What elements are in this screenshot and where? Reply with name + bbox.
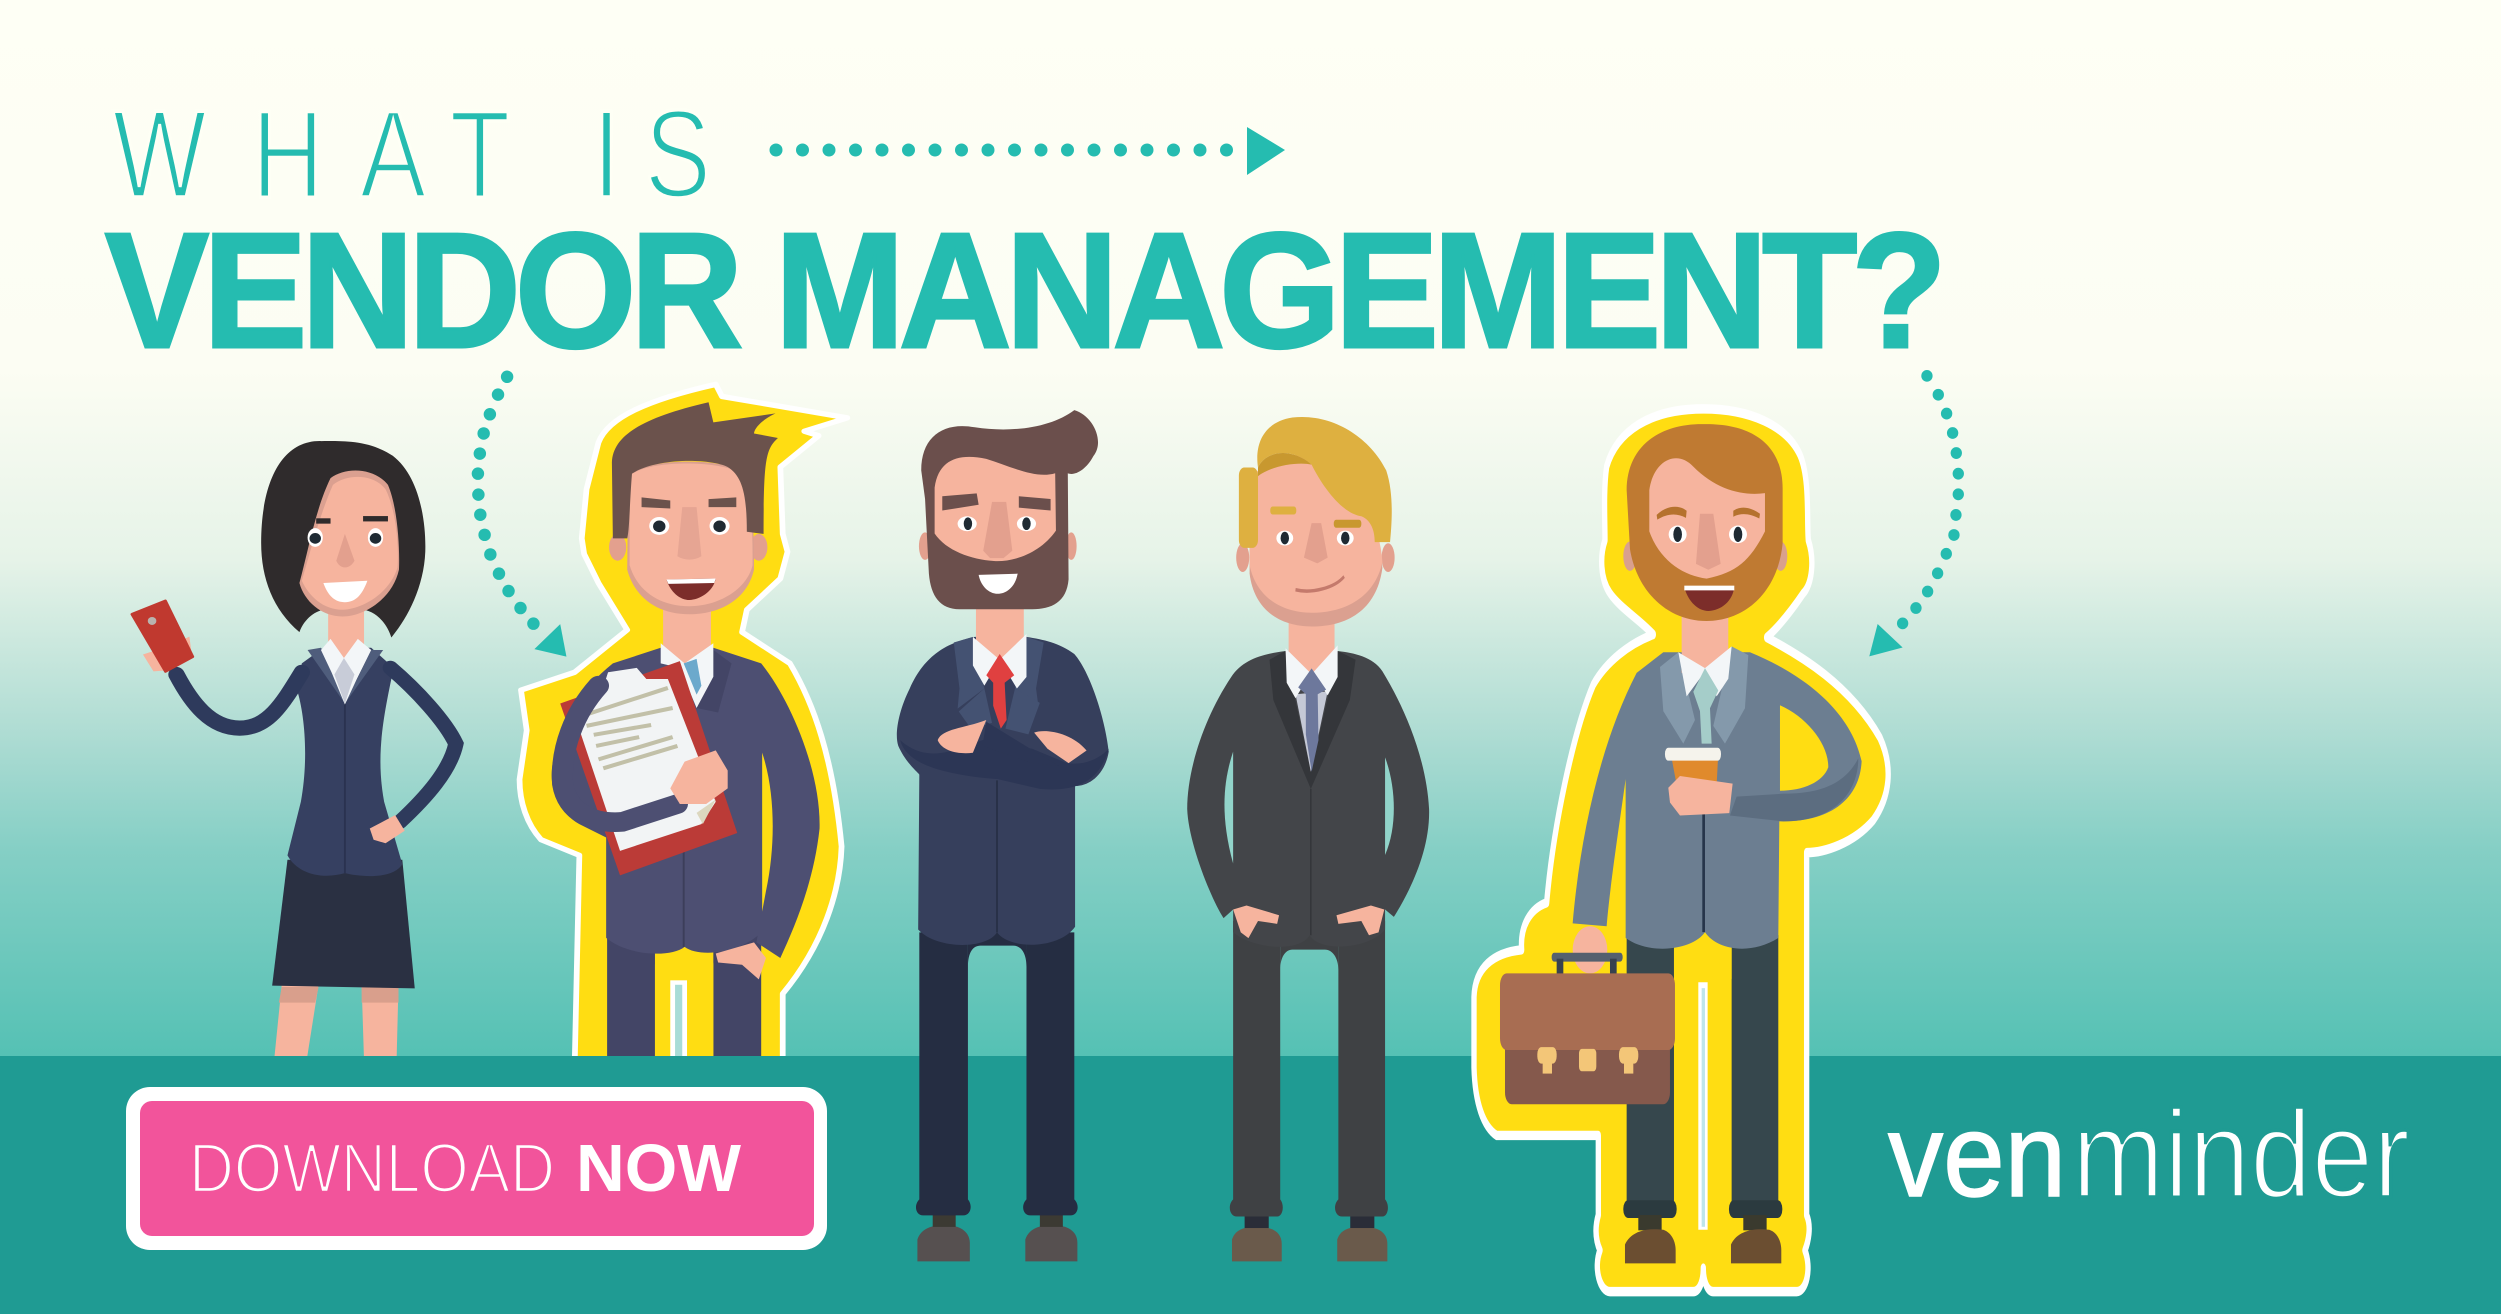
button text: now: NOW [576,1131,742,1206]
man head [1623,424,1787,621]
button text: download: DOWNLOAD [189,1129,555,1207]
logo text: ven: ven [1888,1090,2066,1222]
dotted arrow: left curve [472,371,566,657]
hand on clipboard [670,750,728,804]
highlighted man head [609,402,778,614]
woman jacket [176,648,456,876]
character: highlighted man with clipboard [520,384,847,1070]
woman raised hand [143,637,192,671]
hand in pocket [716,942,766,979]
briefcase [1500,953,1675,1104]
phone [132,601,193,671]
woman hip hand [370,815,405,843]
slit between legs [1698,982,1708,1230]
coffee cup [1665,748,1721,785]
bearded man shirt and red tie [973,607,1026,729]
suit trousers [607,931,761,1061]
character: woman with phone [132,441,456,1061]
character: blond man hands in pockets [1187,417,1429,1261]
suit jacket [552,648,820,958]
blond man hands [1233,905,1384,938]
woman legs [274,985,398,1061]
man trousers and shoes [1623,935,1782,1263]
woman face [299,470,399,617]
bottom teal band [0,1056,2501,1314]
bearded man jacket [897,637,1109,945]
arm holding clipboard [562,686,677,822]
bearded man shoes [917,1214,1077,1261]
bearded man head [919,410,1098,609]
bearded man trousers [916,930,1078,1215]
woman neck and collar [321,608,371,704]
clipboard [560,661,737,875]
woman skirt [272,860,415,988]
woman hair [261,441,425,637]
character: highlighted bearded man with briefcase and coffee [1474,409,1888,1292]
shirt and tie [1678,617,1732,744]
crossed arms [900,720,1109,789]
blond man shirt and tie [1286,617,1338,772]
yellow highlight outline [520,384,847,1070]
blond man trousers [1230,921,1388,1217]
logo: venminder [1888,1086,2410,1224]
logo text: minder: minder [2072,1086,2410,1224]
title: what is: WHAT IS [113,84,711,224]
blond man head [1236,417,1395,626]
yellow highlight outline [1474,409,1888,1292]
shirt and tie [661,608,713,708]
dotted arrow: title [776,127,1285,175]
blond man shoes [1232,1214,1387,1261]
dotted arrow: right curve [1869,370,1964,656]
title: vendor management: VENDOR MANAGEMENT? [105,198,1941,382]
man gray jacket [1573,646,1862,949]
button outer border [126,1087,827,1250]
hand on briefcase [1573,926,1607,973]
button pink fill [140,1101,814,1236]
button: download now [126,1087,827,1250]
character: bearded man arms crossed [897,410,1109,1261]
slit inner [1702,988,1705,1227]
blond man jacket [1187,651,1429,947]
hand holding coffee [1668,776,1733,815]
